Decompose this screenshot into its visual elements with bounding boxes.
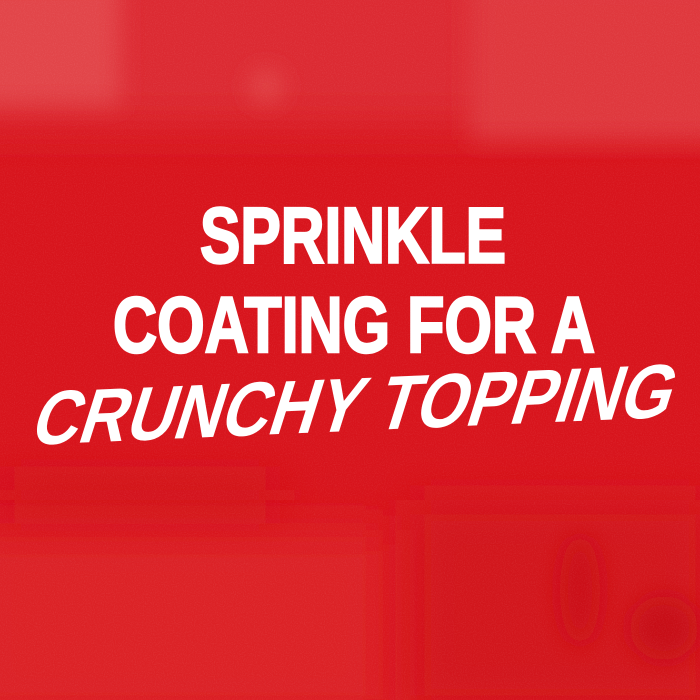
headline (23, 190, 689, 462)
heading line: SPRINKLE: SPRINKLE (200, 190, 506, 280)
